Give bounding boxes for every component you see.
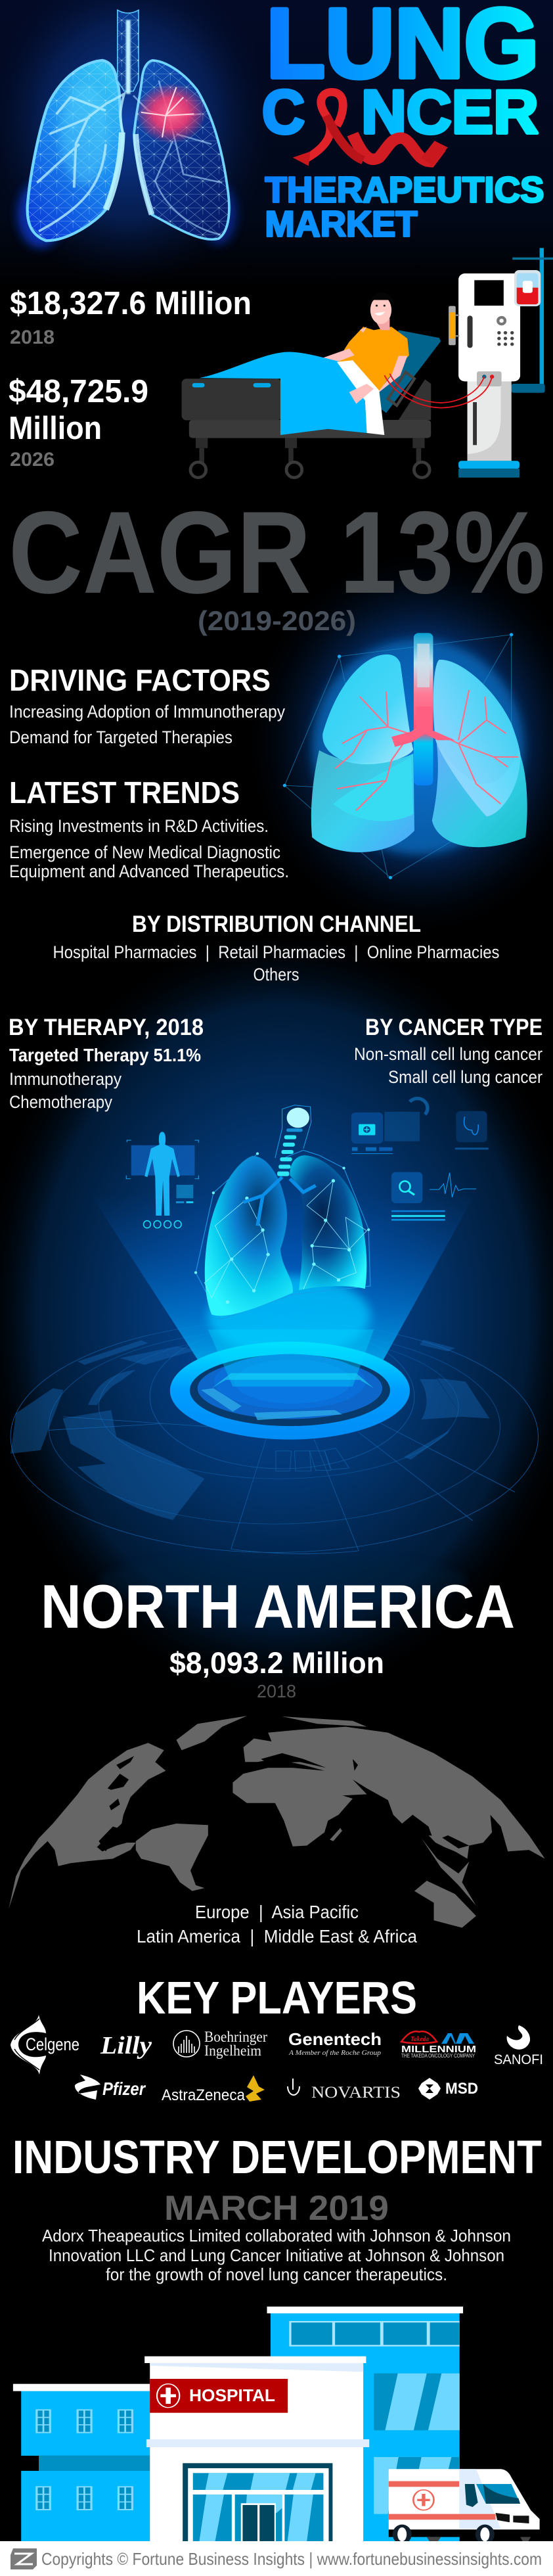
title line: CANCER (262, 78, 539, 146)
logo: Takeda Millennium: THE TAKEDA ONCOLOGY COMPANY (401, 2053, 476, 2059)
driving factors: DRIVING FACTORS (9, 663, 271, 697)
logo: Genentech (288, 2029, 382, 2057)
CAGR figure: (2019-2026) (198, 605, 356, 636)
latest trends: Emergence of New Medical Diagnostic (9, 842, 280, 862)
market value 2018 (10, 286, 252, 348)
market value 2026: Million (9, 411, 102, 446)
icon: medical kit panel (351, 1099, 428, 1154)
logo: MSD (418, 2078, 478, 2100)
driving factors: Demand for Targeted Therapies (9, 727, 232, 747)
logo: AstraZeneca (162, 2075, 265, 2104)
market value 2018: 2018 (10, 327, 55, 348)
logo: MSD: MSD (445, 2080, 478, 2098)
logos: key players (11, 2015, 543, 2104)
logo: Genentech: A Member of the Roche Group (288, 2049, 382, 2057)
industry development: MARCH 2019 (164, 2189, 389, 2228)
logo: Boehringer Ingelheim (173, 2029, 267, 2059)
by distribution channel: Others (254, 965, 299, 984)
logo: Celgene: Celgene (26, 2035, 79, 2054)
industry development: Adorx Theapeautics Limited collaborated with Johnson & Johnson (42, 2226, 511, 2245)
logo: Takeda Millennium: Takeda (410, 2035, 429, 2043)
patient (199, 292, 409, 435)
by therapy: Targeted Therapy 51.1% (9, 1045, 201, 1065)
main white block (144, 2357, 369, 2541)
hospital sign (150, 2379, 288, 2413)
light beams (85, 1145, 474, 1387)
footer (0, 2541, 553, 2576)
illustration: hospital and ambulance (13, 2307, 541, 2544)
by therapy (9, 1015, 204, 1112)
dialysis machine (384, 248, 553, 478)
logo: Takeda Millennium: MILLENNIUM (401, 2044, 476, 2055)
market value 2018: $18,327.6 Million (10, 286, 252, 321)
driving factors (9, 663, 285, 747)
logo: Genentech: Genentech (288, 2029, 382, 2049)
north america heading (41, 1572, 515, 1701)
title line: THERAPEUTICS: THERAPEUTICS (265, 170, 544, 210)
by therapy: BY THERAPY, 2018 (9, 1015, 204, 1040)
logo: Boehringer Ingelheim: Ingelheim (204, 2042, 261, 2059)
icon: red awareness ribbon (293, 92, 448, 166)
driving factors: Increasing Adoption of Immunotherapy (9, 702, 285, 722)
logo: Celgene (11, 2015, 79, 2075)
logo: Boehringer Ingelheim: Boehringer (204, 2029, 267, 2045)
title line: CANCER: NCER (361, 78, 539, 146)
logo: AstraZeneca: AstraZeneca (162, 2086, 246, 2104)
icon: magnifier and heartbeat panel (391, 1172, 476, 1221)
other regions: Europe | Asia Pacific (195, 1902, 359, 1922)
market value 2026 (9, 374, 148, 471)
market value 2026: 2026 (10, 449, 55, 471)
by distribution channel: BY DISTRIBUTION CHANNEL (132, 911, 421, 937)
other regions (137, 1902, 417, 1946)
latest trends: Rising Investments in R&D Activities. (9, 816, 269, 836)
illustration: holographic lung projection (11, 1099, 538, 1553)
latest trends: LATEST TRENDS (9, 775, 240, 810)
north america heading: $8,093.2 Million (169, 1646, 384, 1680)
illustration: glowing lungs with tumour (18, 10, 236, 248)
latest trends (9, 775, 289, 881)
logo: Lilly: Lilly (100, 2032, 152, 2059)
icon: human body scan (126, 1132, 198, 1228)
other regions: Latin America | Middle East & Africa (137, 1926, 417, 1946)
by distribution channel (53, 911, 499, 984)
hologram lungs (194, 1105, 370, 1320)
logo: Sanofi (494, 2025, 543, 2067)
left wing (13, 2384, 150, 2541)
bed (182, 330, 441, 478)
logo: Sanofi: SANOFI (494, 2052, 543, 2067)
logo: Takeda Millennium (401, 2031, 476, 2059)
world map globe (9, 1716, 545, 1927)
by distribution channel: Hospital Pharmacies | Retail Pharmacies | Online Pharmacies (53, 942, 499, 962)
hospital sign text: HOSPITAL (189, 2385, 275, 2405)
icon: stethoscope panel (455, 1111, 489, 1149)
title (262, 0, 544, 244)
north america heading: NORTH AMERICA (41, 1572, 515, 1641)
by cancer type (354, 1015, 542, 1087)
logo: Novartis (288, 2079, 401, 2102)
logo: Pfizer (75, 2075, 146, 2100)
by therapy: Immunotherapy (9, 1069, 122, 1089)
by therapy: Chemotherapy (9, 1092, 112, 1112)
north america heading: 2018 (257, 1681, 296, 1701)
industry development: for the growth of novel lung cancer therapeutics. (106, 2265, 447, 2284)
illustration: patient in bed with dialysis machine (182, 248, 553, 478)
industry development: Innovation LLC and Lung Cancer Initiative at Johnson & Johnson (49, 2245, 504, 2265)
industry development (12, 2132, 542, 2284)
logo: Fortune Business Insights (11, 2548, 37, 2569)
logo: Novartis: NOVARTIS (311, 2084, 401, 2102)
latest trends: Equipment and Advanced Therapeutics. (9, 862, 289, 881)
logo: Pfizer: Pfizer (102, 2079, 146, 2099)
platform disc (170, 1329, 410, 1440)
holographic platform rings (11, 1322, 538, 1553)
title line: CANCER: C (262, 78, 305, 146)
market value 2026: $48,725.9 (9, 374, 148, 409)
illustration: translucent cyan lungs (283, 633, 527, 879)
title line: MARKET: MARKET (265, 204, 418, 244)
ambulance (389, 2469, 541, 2544)
tower block (267, 2307, 463, 2541)
key players heading: KEY PLAYERS (137, 1972, 417, 2023)
